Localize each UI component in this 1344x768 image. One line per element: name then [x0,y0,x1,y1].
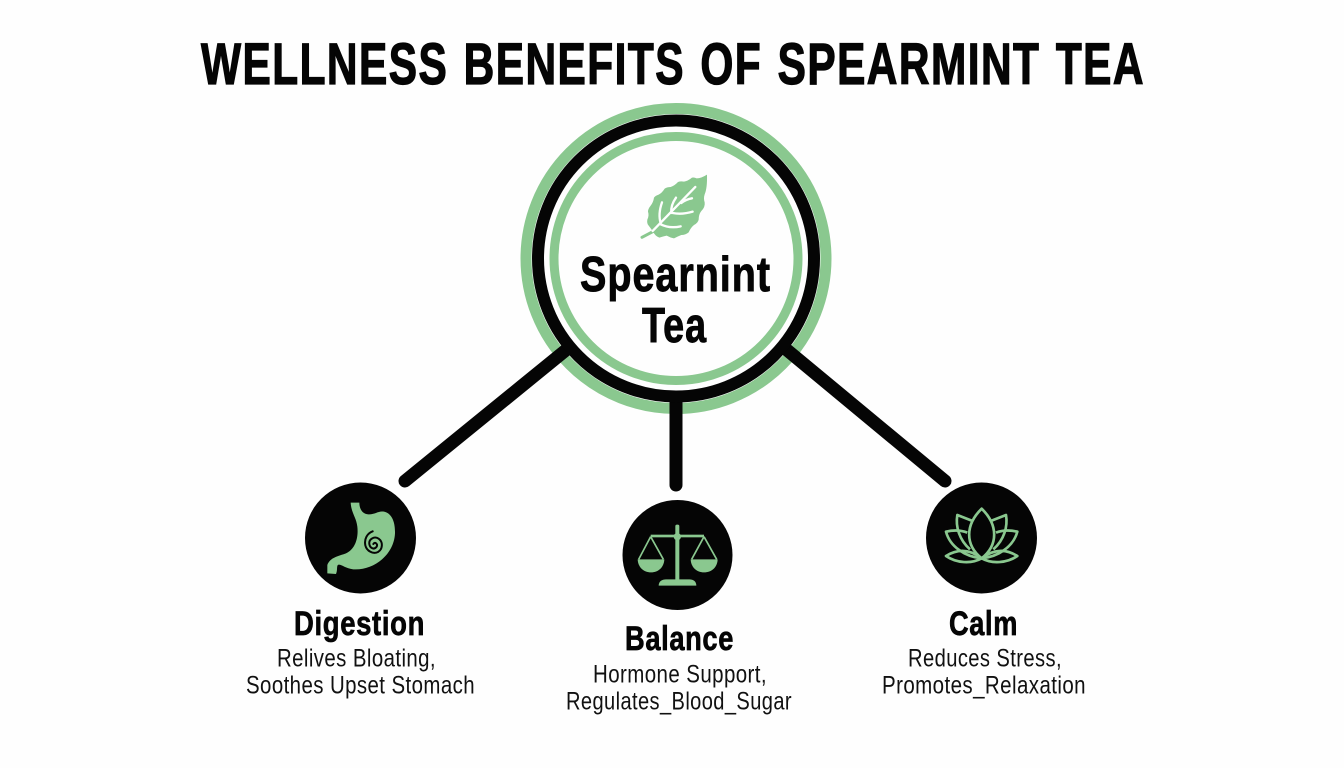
hub label: Spearnint [580,248,771,302]
icon: mint leaf [642,175,707,238]
description: Digestion: Soothes Upset Stomach [246,672,475,700]
description: Calm: Promotes_Relaxation [882,672,1086,700]
hub label: Tea [642,299,707,353]
description: Digestion: Relives Bloating, [277,645,436,673]
icon: balance scale [622,500,732,610]
description: Digestion [246,645,475,700]
connector: balance [670,398,682,485]
heading: Calm: Calm [949,605,1018,643]
description: Calm: Reduces Stress, [908,645,1062,673]
benefit: Calm [882,482,1086,700]
connector arrows from hub to benefits [405,350,945,485]
description: Balance: Hormone Support, [593,661,767,689]
connector: calm [787,350,945,481]
hub outer green ring [526,108,826,408]
description: Balance: Regulates_Blood_Sugar [566,688,792,716]
hub inner green ring [554,136,798,380]
heading: Balance: Balance [625,620,734,658]
benefit: Digestion [246,482,475,700]
central hub: Spearmint Tea [538,120,814,396]
description: Calm [882,645,1086,700]
hub label [580,248,771,353]
connector: digestion [405,350,566,481]
hub black ring [538,120,814,396]
benefit: Balance [566,500,792,716]
icon: stomach [305,482,416,594]
description: Balance [566,661,792,716]
icon: lotus [926,482,1037,594]
heading: Digestion: Digestion [294,605,425,643]
